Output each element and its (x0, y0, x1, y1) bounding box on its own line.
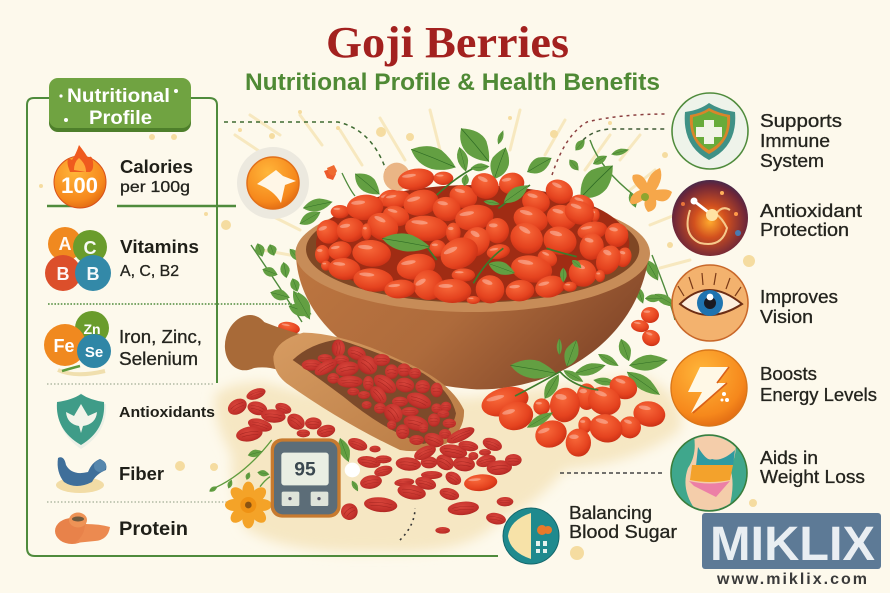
text: fiber: Fiber (119, 464, 164, 484)
scoop of dried goji berries (208, 310, 522, 534)
icon: vitamins: B (86, 264, 100, 284)
icon: orange arrow badge (237, 147, 309, 219)
icon: eye (672, 265, 748, 341)
icon: calories flame 100: 100 (61, 173, 98, 198)
blood glucose meter: 95 (294, 460, 316, 481)
heading: nutritional profile badge (49, 78, 191, 132)
icon: fiber (56, 457, 106, 493)
benefit: vision: Improves (760, 287, 838, 307)
heading: nutritional profile badge: Profile (89, 108, 152, 129)
benefit: energy: Boosts (760, 364, 817, 384)
berries in scoop (302, 340, 456, 450)
icon: minerals: Fe (53, 336, 75, 356)
icon: minerals (44, 311, 111, 374)
text: vitamins (120, 237, 199, 280)
benefit: weight loss: Aids in (760, 448, 818, 468)
text: antioxidants: Antioxidants (119, 404, 215, 421)
berry heap (313, 166, 634, 307)
benefit: energy (671, 350, 877, 426)
text: minerals (119, 327, 202, 369)
radiating sun rays behind bowl (235, 110, 690, 268)
icon: lightning bolt (671, 350, 747, 426)
benefit: antioxidant protection (672, 180, 862, 256)
icon: vitamins (45, 227, 111, 291)
sand patch under scoop (215, 375, 681, 552)
bowl of goji berries (289, 121, 662, 389)
icon: blood sugar badge (503, 508, 559, 564)
foliage around bowl, left and right (251, 137, 678, 349)
icon: vitamins: B (56, 264, 70, 284)
text: vitamins: Vitamins (120, 237, 199, 257)
speckle dots (39, 110, 757, 560)
leaves on top of the berries (381, 163, 583, 283)
dashed connector: antioxidant shield to bowl (224, 122, 386, 170)
blood glucose meter (271, 438, 341, 518)
benefit: immune system: Supports (760, 111, 842, 131)
logo: miklix watermark: www.miklix.com (716, 571, 867, 588)
text: calories (120, 157, 193, 196)
icon: immune shield (672, 93, 748, 169)
icon: protein (55, 512, 110, 544)
text: protein: Protein (119, 519, 188, 540)
berries (478, 372, 667, 457)
icon: antioxidant burst (672, 180, 748, 256)
benefit: vision (672, 265, 838, 341)
text: vitamins: A, C, B2 (120, 263, 179, 280)
benefit: immune system: Immune (760, 131, 830, 151)
divider lines (47, 206, 292, 502)
heading: nutritional profile badge: Nutritional (67, 86, 170, 107)
subtitle: Nutritional Profile & Health Benefits (245, 69, 660, 96)
leaves (509, 337, 669, 402)
benefit: antioxidant protection: Antioxidant (760, 201, 862, 221)
benefit: vision: Vision (760, 307, 813, 327)
icon: waist (671, 435, 747, 512)
title: Goji Berries (326, 18, 569, 67)
text: calories: Calories (120, 157, 193, 177)
dashed connector: weight loss (560, 472, 662, 474)
vine and marigold (208, 436, 360, 528)
logo: miklix watermark (702, 513, 881, 588)
icon: calories flame 100 (54, 145, 106, 208)
wooden bowl (295, 195, 650, 389)
icon: vitamins: C (84, 238, 96, 258)
icon: antioxidants shield (57, 393, 106, 449)
icon: minerals: Se (85, 344, 103, 361)
dotted connector: blood sugar (400, 508, 415, 540)
spilled dried berries (225, 386, 522, 534)
logo: miklix watermark: MIKLIX (710, 518, 875, 571)
text: calories: per 100g (120, 179, 190, 196)
icon: minerals: Zn (83, 321, 101, 337)
benefit: blood sugar (503, 503, 677, 564)
benefit: blood sugar: Balancing (569, 503, 652, 523)
flower: orange blossom (630, 168, 672, 212)
fresh goji berry cluster (478, 337, 669, 457)
benefit: weight loss: Weight Loss (760, 467, 865, 487)
panel: nutritional profile frame (27, 98, 498, 556)
text: minerals: Selenium (119, 349, 198, 369)
benefit: weight loss (671, 435, 865, 512)
text: minerals: Iron, Zinc, (119, 327, 202, 347)
dashed connector: immune system (583, 129, 667, 140)
benefit: immune system (672, 93, 842, 171)
benefit: energy: Energy Levels (760, 385, 877, 405)
leaves behind the berries (289, 121, 662, 322)
dotted connector: antioxidant protection (552, 114, 667, 175)
benefit: antioxidant protection: Protection (760, 220, 849, 240)
benefit: blood sugar: Blood Sugar (569, 522, 677, 542)
icon: vitamins: A (58, 234, 72, 254)
scoop (219, 310, 464, 451)
benefit: immune system: System (760, 151, 824, 171)
